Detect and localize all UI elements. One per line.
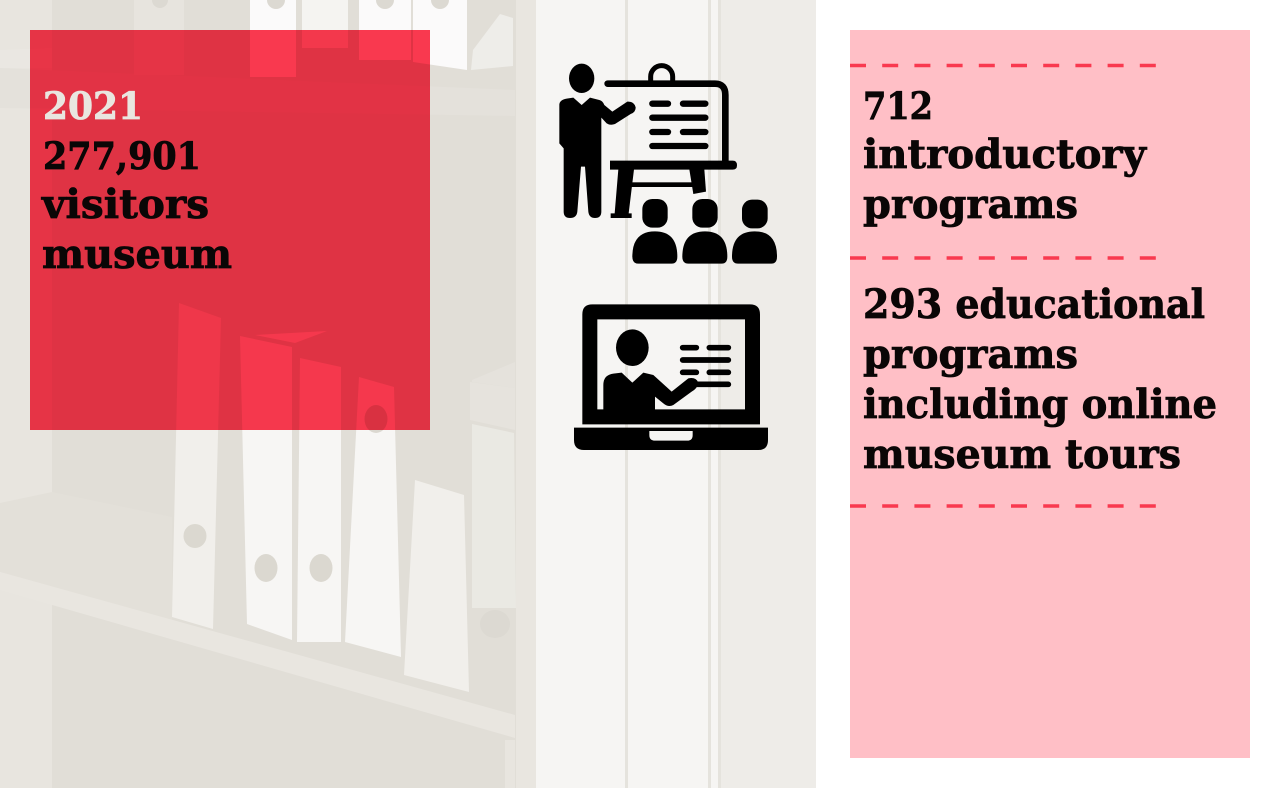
text: visitors: visitors bbox=[41, 181, 209, 228]
text: introductory programs: programs bbox=[863, 181, 1078, 228]
text: museum: museum bbox=[42, 231, 232, 278]
icon: presenter at board with audience bbox=[559, 64, 777, 264]
icon: laptop with online presenter bbox=[574, 304, 768, 450]
text: educational programs: 293 educational bbox=[863, 281, 1205, 328]
text: visitor count: 277,901 bbox=[43, 134, 201, 178]
text: educational programs: including online bbox=[863, 381, 1217, 428]
text: introductory programs: 712 bbox=[863, 84, 933, 128]
panel: red visitors panel bbox=[30, 30, 430, 430]
text: introductory programs bbox=[863, 84, 1148, 228]
text: educational programs: programs bbox=[863, 331, 1078, 378]
heading: year: 2021 bbox=[43, 84, 143, 128]
text: educational programs bbox=[863, 281, 1217, 478]
background: shelf with binders bbox=[0, 0, 816, 788]
text: educational programs: museum tours bbox=[863, 431, 1181, 478]
text: introductory programs: introductory bbox=[863, 131, 1148, 178]
panel: pink programs panel bbox=[850, 30, 1250, 758]
